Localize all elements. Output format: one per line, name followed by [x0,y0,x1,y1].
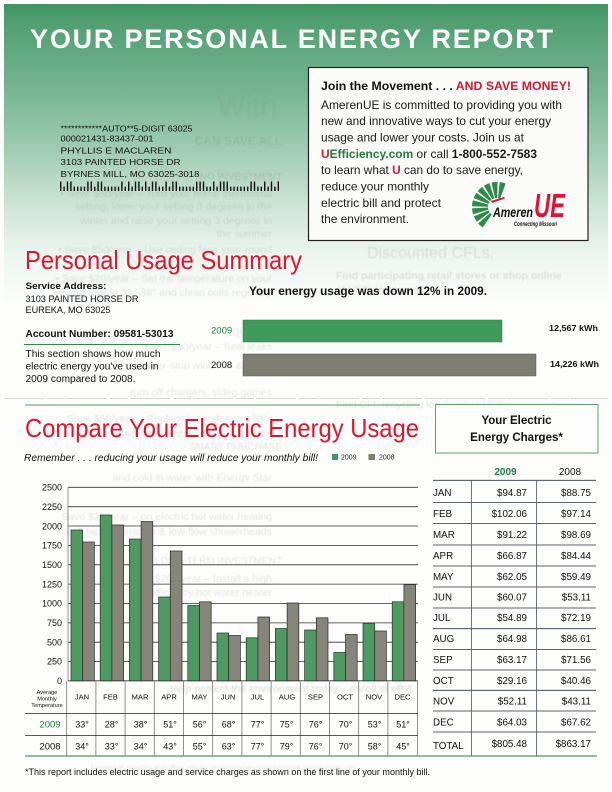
faint show-through text: turn off chargers, video games [130,387,272,399]
faint show-through text: Save $200/year – Install a high [128,573,272,585]
faint show-through text: LONG-TERM INVESTMENT [155,556,282,567]
heading: personal usage summary: Personal Usage Summary [25,245,302,275]
2008 charges: $67.62 [561,718,591,728]
bar chart: annual usage: 2009 [211,326,232,336]
y axis labels: 1750 [42,540,62,550]
y axis labels [42,482,62,686]
2009 charges: $94.87 [497,488,527,499]
2009 charges: $29.16 [497,676,528,687]
mailing address block: ************AUTO**5-DIGIT 63025 [60,124,193,134]
faint show-through text: winter and raise your setting 3 degrees in [79,215,272,227]
2008 charges [556,488,592,750]
faint show-through text: bulbs with compact fluorescent light (CFL) bulbs [48,428,272,440]
2008 temperatures [39,742,410,752]
y axis labels: 0 [57,676,62,686]
service address: Service Address: [26,281,106,291]
faint show-through text: NO INVESTMENT [200,172,282,183]
faint show-through text: efficiency hot water heater [150,587,272,599]
faint show-through text: • Save $50/year – Turn your home thermostat [60,188,272,200]
chart subtitle: Remember . . . reducing your usage will reduce your monthly bill! [24,452,318,464]
faint show-through text: Save $25/year – on electric hot water heating [61,511,272,523]
table column headers [494,467,582,478]
month labels: AUG [279,692,295,702]
2009 charges: $805.48 [492,739,528,750]
2009 temperatures [39,720,410,730]
month column: OCT [433,676,454,687]
2009 temperatures: 28° [105,720,119,730]
2009 temperatures: 68° [222,720,236,730]
y axis labels: 750 [47,618,62,628]
2008 charges: $88.75 [561,488,592,499]
y axis labels: 2000 [42,522,62,532]
2008 charges: $43.11 [562,696,591,708]
2008 temperatures: 76° [309,742,323,752]
faint show-through text: AmerenUE recycles and offers electric customers resources to save energy every day [90,765,356,772]
panel heading: Join the Movement . . . AND SAVE MONEY! [321,79,571,93]
y axis labels: 1250 [42,580,62,590]
month labels [75,692,411,702]
2008 charges: $86.61 [561,634,591,645]
footnote: *This report includes electric usage and service charges as shown on the first line of your monthly bill. [25,767,430,778]
title: YOUR PERSONAL ENERGY REPORT [30,24,554,54]
month column: MAY [433,572,454,583]
faint show-through text [48,90,562,772]
panel: energy charges heading: Your Electric [481,415,552,427]
2008 bars [83,522,416,681]
panel: energy charges heading [436,404,598,453]
chart legend: 2008 [379,454,395,462]
icon: Ameren UE logo: Ameren [492,204,533,220]
2009 charges: $91.22 [497,530,527,541]
month column: SEP [433,655,453,666]
month labels: APR [161,692,177,702]
faint show-through text: and cold in water with Energy Star [113,472,272,484]
faint show-through text: With [217,90,277,123]
temperature row label: Temperature [31,703,63,709]
2009 temperatures: 2009 [39,720,61,730]
usage headline: Your energy usage was down 12% in 2009. [249,286,487,298]
2008 charges: $53.11 [562,592,591,604]
y axis labels: 1500 [42,560,62,570]
2008 charges: $59.49 [561,572,591,583]
2008 charges: $84.44 [561,551,592,562]
panel body text: the environment. [321,213,409,226]
2009 charges: $102.06 [492,509,528,520]
2008 temperatures: 58° [368,742,382,752]
2008 temperatures: 77° [251,742,265,752]
2008 temperatures: 34° [134,742,148,752]
chart legend: 2009 [341,454,357,462]
panel body text [321,99,562,226]
panel body text: UEfficiency.com or call 1-800-552-7583 [321,148,538,161]
month column: JUL [433,613,451,624]
2008 temperatures: 34° [75,742,89,752]
2009 temperatures: 75° [280,720,294,730]
faint show-through text: refrigerator to 35°-38° and clean coils regularly [55,287,273,299]
mailing address block [60,124,280,189]
table: energy charges [433,467,596,756]
month column: JUN [433,592,452,604]
service address [26,281,138,315]
2009 temperatures: 33° [75,720,89,730]
y axis labels: 2250 [42,502,62,512]
mailing address block: BYRNES MILL, MO 63025-3018 [60,169,200,179]
2009 temperatures: 53° [368,720,382,730]
faint show-through text: SMART PURCHASE [189,442,282,453]
2009 bars [71,515,404,681]
2008 temperatures: 45° [396,742,410,752]
faint show-through text: install faucet aerators & low-flow showerheads [56,526,272,538]
2008 charges: $863.17 [556,739,591,750]
month column: DEC [433,718,454,728]
y axis labels: 250 [47,656,62,666]
faint show-through text: • Save $20/year – Set the temperature on your [55,273,272,285]
panel body text: usage and lower your costs. Join us at [321,132,525,144]
green header background [4,4,608,300]
2009 temperatures: 56° [193,720,207,730]
2009 charges: $52.11 [498,696,527,708]
postal barcode [60,182,280,189]
temperature row label [31,690,63,709]
month labels: FEB [103,692,118,702]
month column: TOTAL [433,741,464,752]
month labels: MAR [132,692,149,702]
usage section description: This section shows how much [26,349,160,360]
2008 temperatures: 79° [280,742,294,752]
bar chart: annual usage: 12,567 kWh [549,323,598,333]
2009 temperatures: 51° [163,720,177,730]
faint show-through text: the summer [217,228,272,240]
panel body text: electric bill and protect [321,197,442,210]
icon: Ameren UE logo [473,183,566,231]
2009 charges: $54.89 [497,613,527,624]
icon: Ameren UE logo: UE [534,187,566,224]
table column headers: 2008 [559,467,582,478]
panel body text: new and innovative ways to cut your energy [321,115,551,128]
faint show-through text: setting, lower your setting 3 degrees in the [75,201,272,213]
y axis labels: 500 [47,638,62,648]
2009 temperatures: 51° [396,720,410,730]
temperature table [25,681,418,756]
service address: 3103 PAINTED HORSE DR [26,294,138,304]
panel body text: AmerenUE is committed to providing you with [321,99,562,112]
usage section description: electric energy you've used in [26,362,158,372]
month column: AUG [433,634,454,645]
2008 charges: $97.14 [561,509,592,520]
month labels: JUL [251,692,264,702]
faint show-through text: QUICK FIX [232,327,282,338]
2008 temperatures: 63° [222,742,236,752]
month column: APR [433,551,453,562]
table column headers: 2009 [494,467,517,478]
month column: MAR [433,530,455,541]
bar chart: annual usage: 14,226 kWh [550,359,599,369]
2009 temperatures: 76° [309,720,323,730]
month labels: OCT [337,692,353,702]
2009 charges: $66.87 [497,551,527,562]
2008 temperatures: 43° [163,742,177,752]
panel: join the movement [308,68,588,240]
month labels: DEC [394,692,411,702]
mailing address block: 3103 PAINTED HORSE DR [60,157,180,167]
panel body text: reduce your monthly [321,180,429,194]
service address: EUREKA, MO 63025 [26,305,111,315]
faint show-through text: Help protect the environment today – enroll in eBill [170,684,412,695]
faint show-through text: at UEfficiency.com [336,284,422,296]
usage section description: 2009 compared to 2008. [26,374,136,385]
bar chart: annual usage: 2008 [211,360,232,371]
temperature row label: Average [37,690,57,696]
faint show-through text: Find CFL recycling locations at UEfficiency.com [336,399,557,411]
2009 charges: $64.03 [497,718,528,728]
mailing address block: 000021431-83437-001 [60,134,154,144]
2008 charges: $71.56 [561,655,592,666]
month column: NOV [433,696,455,708]
2009 temperatures: 70° [339,720,353,730]
month labels: NOV [366,692,383,702]
2009 charges: $63.17 [497,655,527,666]
faint show-through text: • Save $50/year – Use ceiling fans year-round [58,244,272,256]
2008 temperatures: 33° [105,742,119,752]
y axis labels: 2500 [42,482,62,492]
month column: JAN [433,488,452,499]
month labels: JAN [75,692,89,702]
2009 temperatures: 38° [134,720,148,730]
month column [433,488,464,752]
faint show-through text: Save $50/year – Seal leaks [144,341,272,353]
panel body text: to learn what U can do to save energy, [321,164,523,177]
faint show-through text: CAN SAVE ALL [195,134,282,148]
account number: Account Number: 09581-53013 [26,329,174,340]
faint show-through text: Save $50/year – Replace incandescent light [67,413,272,425]
2009 charges: $60.07 [497,592,527,604]
faint show-through text: Find participating retail stores or shop online [336,270,562,282]
2009 charges [492,488,528,750]
2008 temperatures: 55° [193,742,207,752]
faint show-through text: Recycle Your Old CFLs [336,320,501,337]
2008 temperatures: 70° [339,742,353,752]
2009 temperatures: 77° [251,720,265,730]
2008 charges: $72.19 [561,613,591,624]
y axis labels: 1000 [42,598,62,608]
2009 charges: $62.05 [497,572,528,583]
heading: compare usage: Compare Your Electric Energy Usage [25,413,419,443]
chart legend [332,454,395,462]
2008 charges: $98.69 [561,530,591,541]
mailing address block: PHYLLIS E MACLAREN [60,146,172,156]
faint show-through text: weather-strip windows & doors [128,360,272,372]
panel: energy charges heading: Energy Charges* [470,432,563,444]
usage section description [26,349,160,385]
month labels: JUN [221,692,235,702]
month column: FEB [433,509,453,520]
temperature row label: Monthly [37,696,57,702]
month labels: MAY [192,692,207,702]
2008 charges: $40.46 [561,676,592,687]
bar chart: annual usage [211,320,599,376]
month labels: SEP [308,692,323,702]
2008 temperatures: 2008 [39,742,61,752]
2009 charges: $64.98 [497,634,528,645]
icon: Ameren UE logo: Connecting Missouri [514,222,557,228]
faint show-through text: Discounted CFLs. [367,245,494,262]
bar chart: monthly usage [42,482,418,686]
